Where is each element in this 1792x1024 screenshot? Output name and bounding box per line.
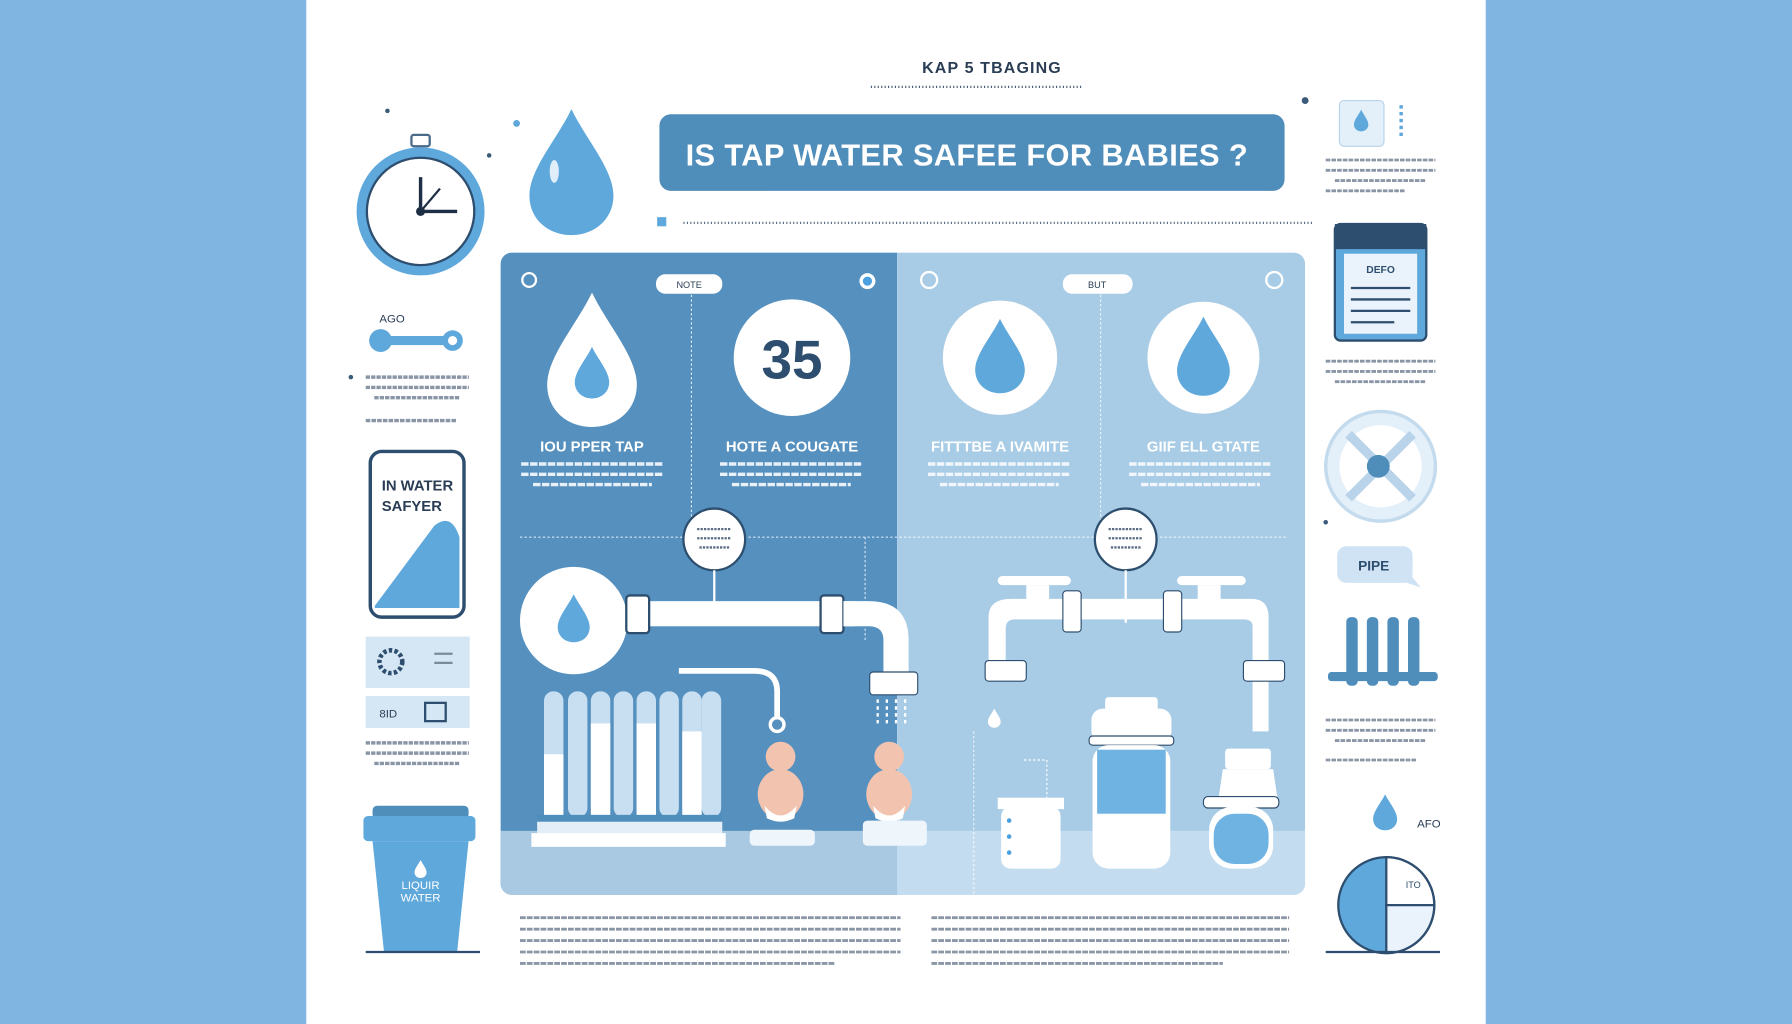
card 3: FITTTBE A IVAMITE: [931, 439, 1069, 455]
card 1: IOU PPER TAP: [540, 439, 644, 455]
badges: [683, 509, 1157, 623]
pie: ITO: [1406, 880, 1421, 890]
card 3: [928, 301, 1071, 485]
speech bubble: PIPE: [1358, 558, 1389, 573]
drop AFO: AFO: [1417, 818, 1441, 830]
card 1: [521, 293, 664, 485]
title banner: IS TAP WATER SAFEE FOR BABIES ?: [686, 138, 1248, 173]
card 2: HOTE A COUGATE: [726, 439, 858, 455]
right pipe system: [985, 576, 1285, 800]
filter jar: [1089, 697, 1174, 869]
test tubes: [531, 691, 726, 847]
beaker: [998, 798, 1064, 869]
speech bubble: [1337, 546, 1421, 587]
subtitle: KAP 5 TBAGING: [922, 60, 1062, 77]
icon: cup: [363, 806, 475, 952]
icon: phone: IN WATER: [382, 478, 453, 494]
icon: key: [369, 313, 463, 352]
settings cards: [366, 637, 470, 728]
title banner: [659, 114, 1285, 191]
pill labels: NOTE: [676, 280, 702, 290]
settings cards: 8ID: [379, 709, 397, 721]
pill labels: [656, 274, 1133, 294]
drop AFO: [1373, 794, 1441, 830]
filter cartridge: [1203, 749, 1279, 869]
right text 3: [1326, 720, 1435, 760]
card 4: [1129, 302, 1272, 485]
icon: radiator: [1328, 617, 1438, 686]
bottom text right: [931, 918, 1289, 963]
card 4: GIIF ELL GTATE: [1147, 439, 1260, 455]
right: water card: [1339, 101, 1401, 146]
card 2: 35: [761, 328, 823, 390]
right text 1: [1326, 160, 1435, 191]
icon: phone: SAFYER: [382, 499, 442, 515]
icon: big drop: [529, 109, 613, 235]
icon: disc: [1326, 411, 1435, 521]
icon: key: AGO: [379, 313, 405, 325]
icon: cup: WATER: [401, 893, 441, 905]
pill labels: BUT: [1088, 280, 1107, 290]
text block left 2: [366, 743, 469, 763]
text block left 1: [366, 377, 469, 421]
babies: [750, 742, 927, 846]
sparkles: [349, 97, 1328, 525]
main panel: [501, 253, 1305, 895]
icon: phone: [370, 451, 464, 617]
icon: cup: LIQUIR: [402, 880, 440, 892]
icon: calendar: DEFO: [1366, 265, 1395, 276]
icon: calendar: [1335, 224, 1426, 341]
pie: [1338, 857, 1434, 953]
left pipe system: [520, 567, 918, 731]
bottom text left: [520, 918, 901, 963]
icon: clock: [357, 135, 485, 275]
card 2: [720, 299, 863, 485]
right text 2: [1326, 361, 1435, 382]
